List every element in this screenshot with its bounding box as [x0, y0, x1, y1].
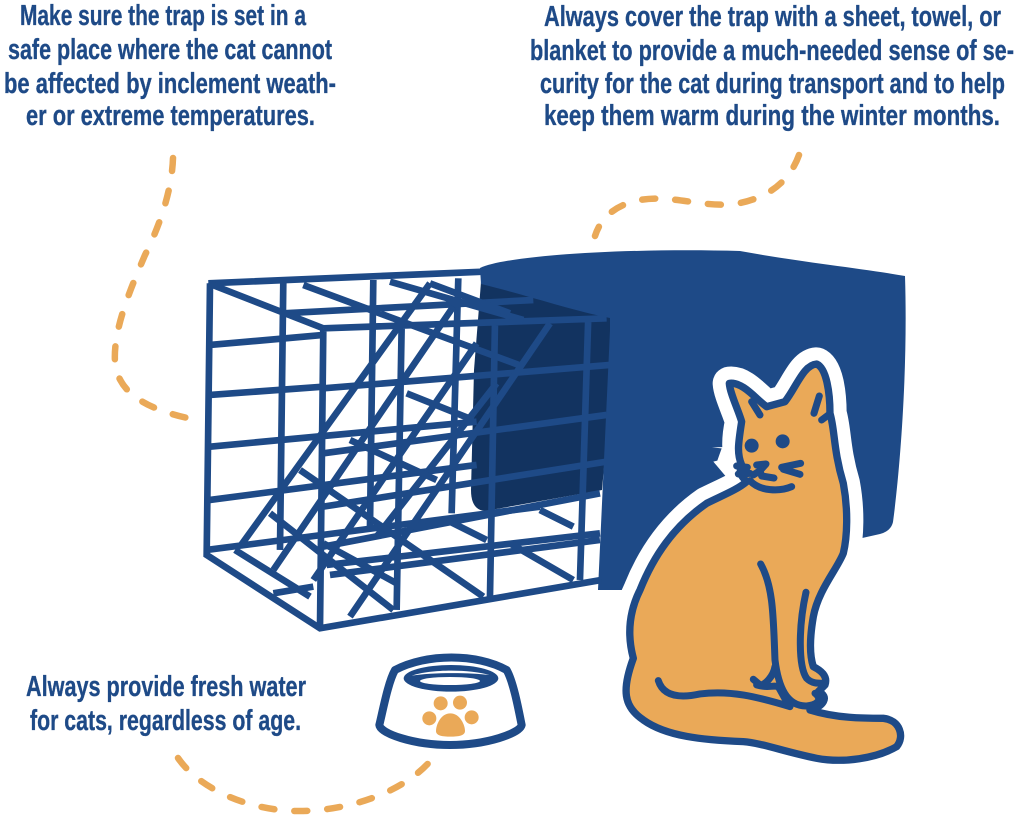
- bowl body: [379, 657, 522, 745]
- arrow: dashed line from placement text to trap: [115, 158, 192, 419]
- cat inner lines: [658, 396, 828, 707]
- text: trap placement advice: Make sure the trap is set in a: [20, 0, 307, 32]
- cat white halo: [626, 364, 901, 760]
- icon: water bowl with paw: [379, 657, 522, 745]
- text: trap placement advice: be affected by inclement weath-: [4, 68, 336, 100]
- text: trap placement advice: safe place where the cat cannot: [8, 34, 332, 66]
- arrow: dashed line from water text to bowl: [178, 755, 435, 811]
- text: trap placement advice: er or extreme temperatures.: [26, 100, 315, 132]
- bowl rim: [404, 665, 498, 692]
- cat body: [626, 364, 901, 760]
- cat eyes: [745, 439, 759, 453]
- paw print: [422, 696, 479, 737]
- text: cover the trap advice: [530, 1, 1014, 132]
- arrow: dashed line from cover text to sheet: [595, 155, 799, 236]
- sheet covering trap: [480, 250, 906, 590]
- text: fresh water advice: Always provide fresh water: [26, 671, 306, 703]
- cat fur tuft: [712, 447, 743, 482]
- text: fresh water advice: [26, 671, 306, 737]
- text: fresh water advice: for cats, regardless of age.: [30, 705, 301, 737]
- wire cage: [207, 272, 610, 628]
- illustration: orange cat: [626, 364, 901, 760]
- trap covered with sheet: [207, 250, 906, 628]
- sheet interior shadow: [471, 282, 610, 511]
- text: trap placement advice: [4, 0, 336, 132]
